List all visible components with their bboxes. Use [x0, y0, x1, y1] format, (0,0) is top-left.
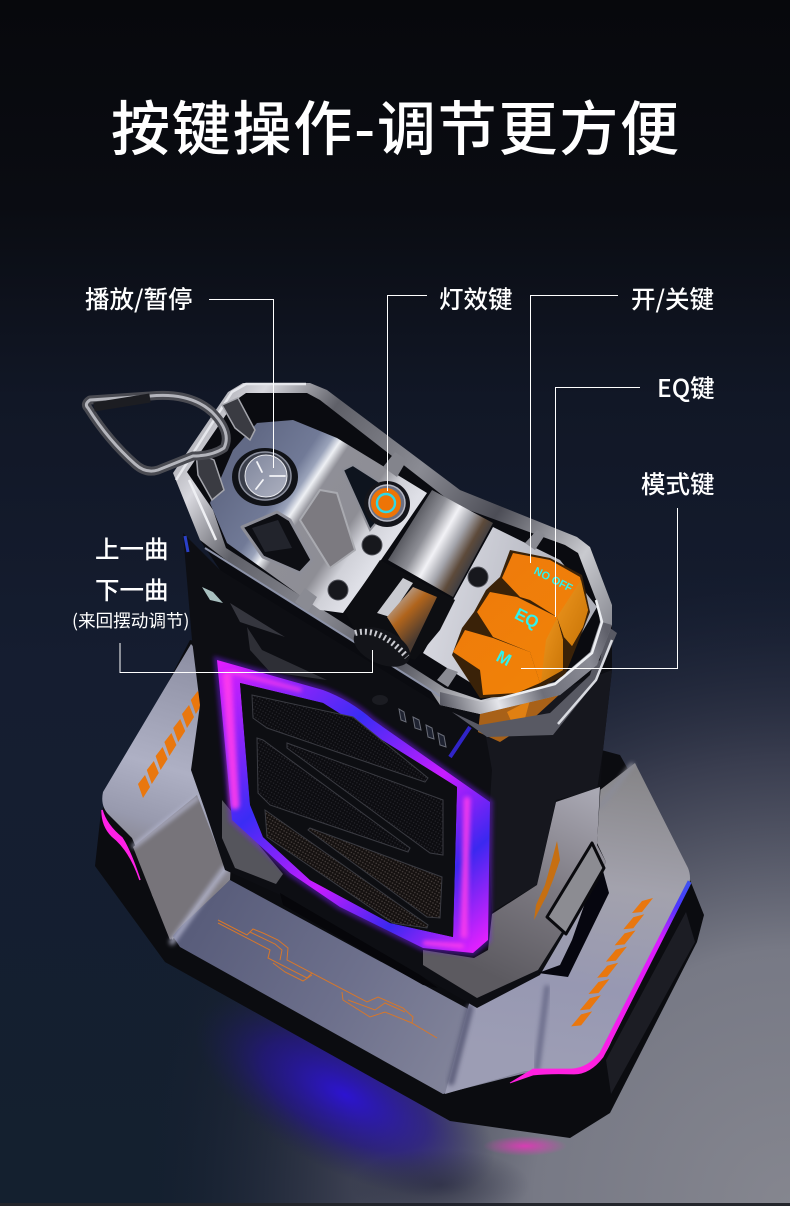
play/pause button: [232, 448, 298, 506]
small round port: [372, 695, 388, 705]
light window: [343, 465, 400, 530]
left magenta light strip: [102, 810, 140, 880]
callout: power key: 开/关键: [631, 281, 714, 316]
charging base: [95, 640, 704, 1138]
cylinder roller: [388, 490, 493, 597]
base fold highlights: [134, 765, 632, 1082]
orange decal on body: [534, 841, 560, 920]
clip slot: [538, 860, 609, 977]
switch cutout: [242, 512, 312, 573]
ring inner highlight: [189, 480, 216, 540]
grille mesh lower left: [265, 810, 428, 928]
recessed pad: [300, 490, 355, 568]
ring lower-left edge line: [205, 548, 440, 696]
deck dark interior: [176, 383, 612, 714]
base left wing surface: [102, 644, 240, 940]
side metal fin: [202, 587, 223, 603]
grille mesh lower right: [308, 828, 442, 918]
knurled wheel: [348, 619, 416, 675]
front ring inner highlight: [498, 600, 602, 699]
right light strip: [510, 881, 691, 1083]
callout: EQ key: EQ键: [657, 370, 715, 405]
grille mesh top: [252, 695, 428, 782]
M key: [453, 630, 540, 695]
speaker grille panel: [240, 683, 457, 937]
callout: previous/next track: (来回摆动调节): [72, 608, 189, 633]
callout: EQ key: [556, 370, 715, 617]
callout: power key: [530, 281, 714, 563]
button tick marks: [256, 462, 285, 489]
title: 按键操作-调节更方便: [111, 82, 679, 167]
carabiner black gate: [94, 398, 150, 407]
base side panel: [606, 912, 695, 1094]
callout: play/pause: 播放/暂停: [85, 281, 193, 316]
silver shaft: [377, 578, 413, 617]
black bracket: [345, 560, 455, 660]
base front dark recess: [280, 893, 438, 988]
NO OFF key side: [557, 580, 588, 646]
right orange stripes: [571, 898, 653, 1026]
callout: mode key: 模式键: [641, 466, 714, 501]
key shadow: [452, 550, 590, 698]
left orange stripes: [138, 691, 203, 798]
front ring over keys: [440, 622, 612, 714]
blue edge left side: [185, 536, 188, 552]
screws: [328, 535, 382, 600]
front orange circuit graphic: [218, 920, 437, 1038]
lower left facet: [133, 795, 225, 940]
switch lever: [252, 520, 292, 552]
callout: mode key: [521, 466, 714, 668]
side blade: [230, 603, 285, 637]
usb vents: [399, 709, 446, 747]
lower ring highlight: [558, 640, 612, 724]
carabiner tube highlight: [86, 395, 226, 471]
small clip tab: [383, 452, 407, 477]
clip metal tab: [547, 843, 604, 934]
ring top highlight: [176, 384, 306, 480]
callout: light effect key: 灯效键: [439, 281, 512, 316]
right silver plate: [423, 527, 597, 693]
right metallic lower body: [423, 787, 606, 998]
orange under keys: [478, 694, 560, 742]
orange metal shaft: [387, 587, 437, 653]
carabiner clip: [86, 395, 226, 471]
base front surface: [172, 880, 580, 1094]
LED hot highlights: [227, 672, 467, 946]
speaker tower body: [183, 533, 617, 1008]
base right wing surface: [445, 763, 690, 1094]
EQ key side: [541, 618, 563, 682]
screw on right plate: [468, 567, 488, 587]
ring lugs: [196, 398, 255, 500]
callout: previous/next track: [72, 531, 372, 672]
NO OFF key: [502, 553, 588, 646]
lower side bracket: [247, 627, 327, 680]
main top plate: [210, 420, 427, 613]
control deck: [173, 383, 612, 714]
metal ring frame: [173, 383, 612, 714]
callout: previous/next track: 下一曲: [95, 572, 168, 607]
key legend NO OFF: NO OFF: [532, 565, 574, 595]
purple glow: [217, 660, 490, 953]
callout: light effect key: [388, 281, 512, 491]
light effect button: [364, 481, 410, 527]
right body panel: [483, 670, 612, 912]
purple LED frame: [217, 660, 490, 953]
grille mesh middle right: [287, 743, 443, 855]
key legend EQ: EQ: [512, 604, 542, 632]
grille mesh middle left: [257, 738, 410, 852]
blue seam beside vents: [450, 727, 470, 757]
under-base coloured glow: [164, 951, 567, 1206]
callout: play/pause: [85, 281, 274, 468]
outer lower ring: [452, 625, 617, 737]
callout: previous/next track: 上一曲: [95, 531, 168, 566]
base dark plinth: [95, 640, 704, 1138]
EQ key: [477, 592, 563, 683]
tower dark silhouette: [183, 533, 612, 1008]
key legend M: M: [493, 647, 514, 670]
left metallic lower body: [222, 800, 283, 884]
clip tabs: [295, 530, 545, 687]
